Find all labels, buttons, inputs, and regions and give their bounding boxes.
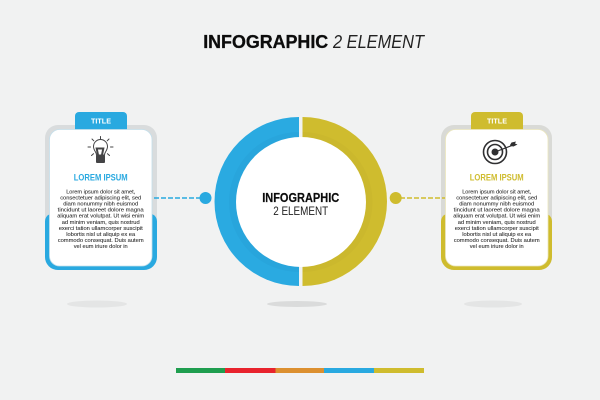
panel: left card: [45, 112, 157, 308]
text block: vel eum iriure dolor in: [470, 244, 524, 250]
text block: aliquam erat volutpat. Ut wisi enim: [57, 214, 144, 220]
text block: commodo consequat. Duis autem: [454, 238, 540, 244]
text block: lobortis nisl ut aliquip ex ea: [66, 232, 136, 238]
card backing: [45, 125, 157, 270]
icon: light bulb: [88, 136, 113, 163]
text block: lobortis nisl ut aliquip ex ea: [462, 232, 532, 238]
text block: exerci tation ullamcorper suscipit: [455, 226, 539, 232]
text block: aliquam erat volutpat. Ut wisi enim: [453, 214, 540, 220]
text block: tincidunt ut laoreet dolore magna: [58, 208, 144, 214]
center label: 2 ELEMENT: [273, 204, 329, 218]
right connector: [390, 192, 445, 204]
tab: TITLE: [487, 118, 507, 125]
center shadow: [267, 301, 327, 307]
card backing: [441, 125, 552, 270]
card accent: [441, 214, 552, 270]
text block: ad minim veniam, quis nostrud: [458, 220, 536, 226]
panel: right card: [441, 112, 552, 308]
tab: [471, 112, 523, 130]
text block: Lorem ipsum dolor sit amet,: [66, 190, 136, 196]
text block: diam nonummy nibh euismod: [459, 202, 534, 208]
text block: Lorem ipsum dolor sit amet,: [462, 190, 532, 196]
title: INFOGRAPHIC: [203, 31, 328, 52]
text block: exerci tation ullamcorper suscipit: [59, 226, 143, 232]
text block: [57, 190, 144, 250]
card shadow: [464, 300, 522, 308]
segment: yellow: [302, 117, 387, 286]
tab: TITLE: [91, 118, 111, 125]
heading: LOREM IPSUM: [470, 172, 524, 182]
heading: LOREM IPSUM: [74, 172, 128, 182]
center circle: [236, 137, 366, 267]
card face: [446, 130, 548, 266]
title: [203, 31, 426, 52]
text block: vel eum iriure dolor in: [74, 244, 128, 250]
color bar: [176, 368, 424, 373]
card shadow: [67, 300, 127, 308]
text block: consectetuer adipiscing elit, sed: [456, 196, 537, 202]
left connector: [154, 192, 212, 204]
card face: [50, 130, 152, 266]
text block: commodo consequat. Duis autem: [58, 238, 144, 244]
donut chart: [215, 117, 387, 286]
text block: ad minim veniam, quis nostrud: [62, 220, 140, 226]
title: 2 ELEMENT: [332, 31, 426, 52]
tab: [75, 112, 127, 130]
text block: consectetuer adipiscing elit, sed: [60, 196, 141, 202]
segment: blue: [215, 117, 299, 286]
icon: target: [484, 140, 518, 164]
text block: diam nonummy nibh euismod: [63, 202, 138, 208]
text block: [453, 190, 540, 250]
card accent: [45, 214, 157, 270]
text block: tincidunt ut laoreet dolore magna: [454, 208, 540, 214]
center label: INFOGRAPHIC: [262, 191, 339, 205]
center label: [262, 191, 339, 218]
